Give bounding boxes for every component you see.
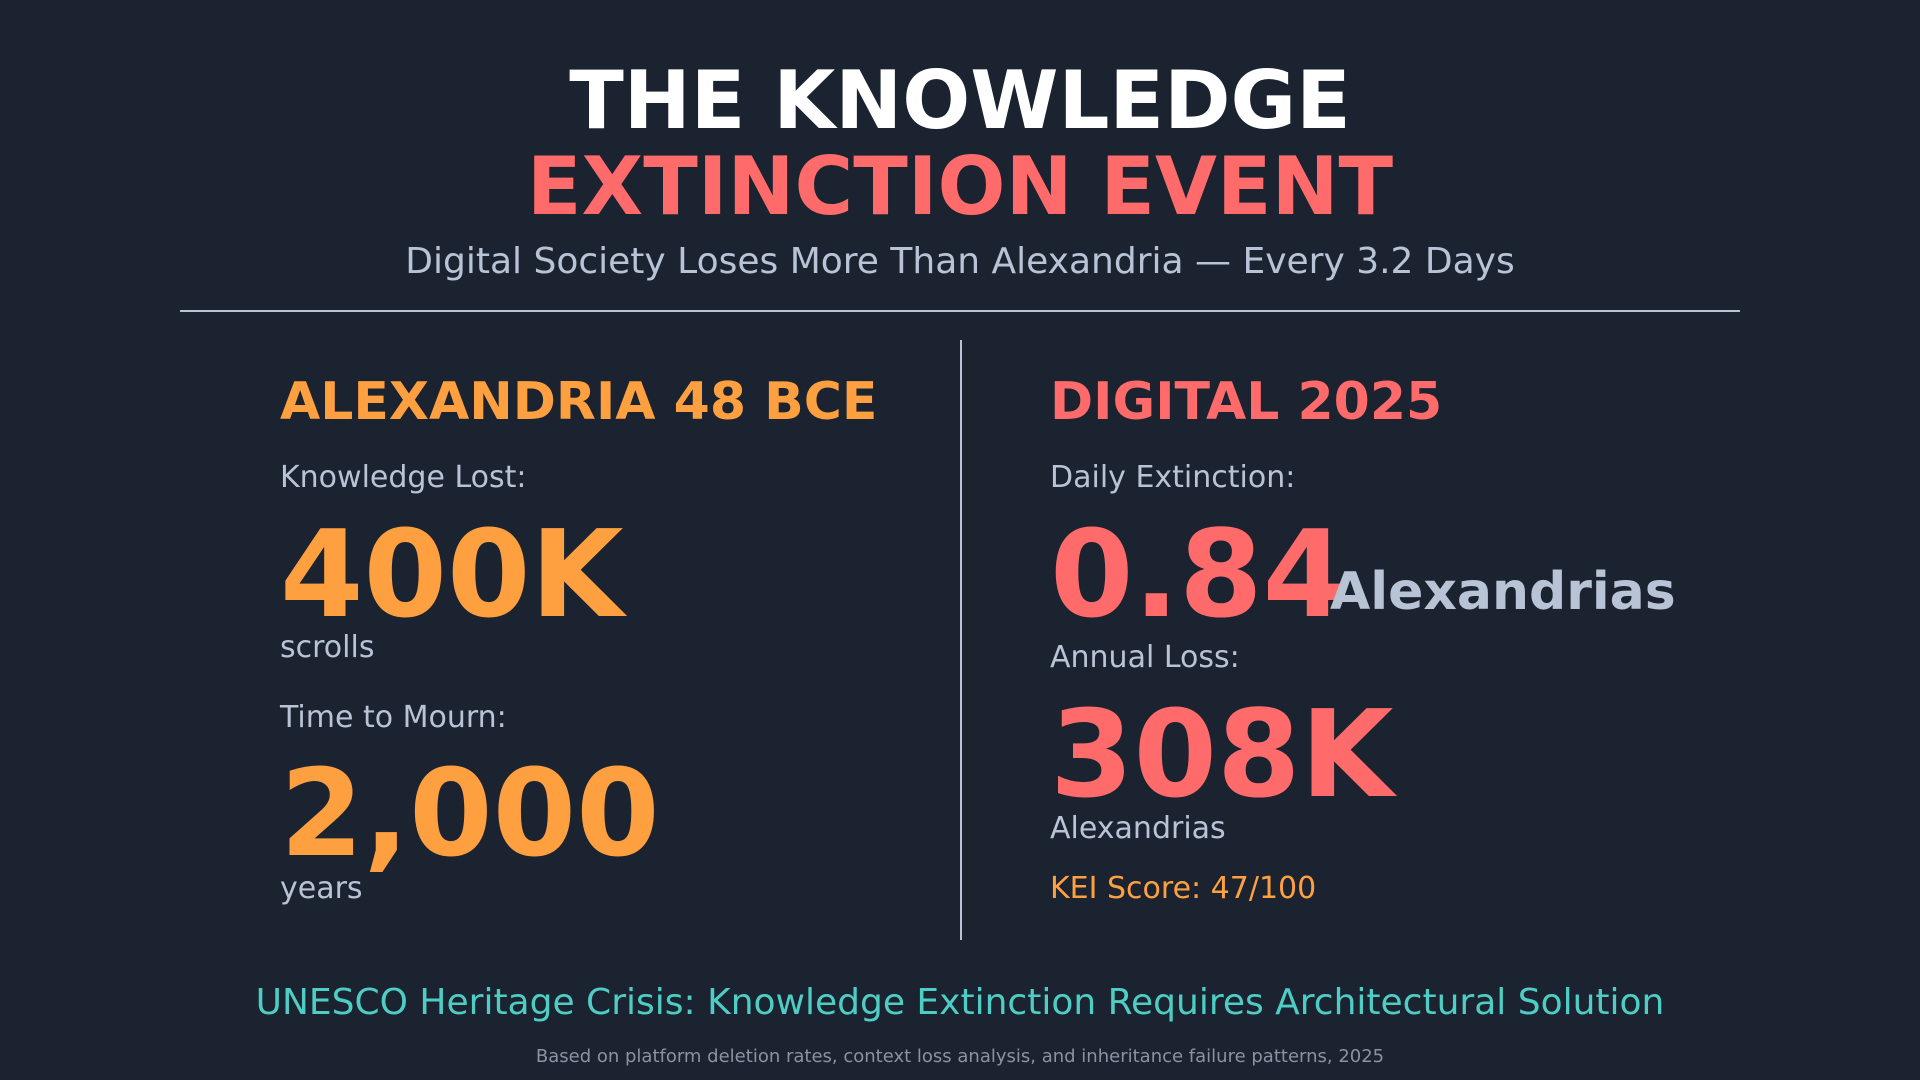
label: time to mourn: Time to Mourn: (279, 700, 507, 735)
stat: 308K alexandrias: 308K (1050, 686, 1397, 825)
title: THE KNOWLEDGE (569, 54, 1351, 147)
title (527, 54, 1394, 233)
stat: 2,000 years: years (280, 871, 363, 906)
stat: 2,000 years: 2,000 (280, 745, 660, 884)
stat: 0.84 alexandrias: 0.84 (1050, 506, 1346, 645)
source note: Based on platform deletion rates, context loss analysis, and inheritance failure patterns, 2025 (536, 1046, 1384, 1067)
stat: 400K scrolls: scrolls (280, 630, 374, 665)
subtitle: Digital Society Loses More Than Alexandria — Every 3.2 Days (405, 241, 1515, 282)
stat: 0.84 alexandrias (1050, 506, 1676, 645)
label: daily extinction: Daily Extinction: (1050, 460, 1295, 495)
footer callout: UNESCO Heritage Crisis: Knowledge Extinction Requires Architectural Solution (256, 982, 1664, 1023)
label: annual loss: Annual Loss: (1050, 640, 1240, 675)
heading: alexandria: ALEXANDRIA 48 BCE (280, 372, 877, 432)
label: knowledge lost: Knowledge Lost: (280, 460, 526, 495)
title: EXTINCTION EVENT (527, 140, 1394, 233)
KEI score: KEI Score: 47/100 (1050, 871, 1316, 906)
stat: 0.84 alexandrias: Alexandrias (1330, 562, 1676, 622)
panel: alexandria 48 BCE (279, 372, 877, 906)
stat: 400K scrolls: 400K (280, 506, 627, 645)
stat: 308K alexandrias: Alexandrias (1050, 811, 1226, 846)
heading: digital 2025: DIGITAL 2025 (1050, 372, 1442, 432)
panel: digital 2025 (1050, 372, 1676, 906)
